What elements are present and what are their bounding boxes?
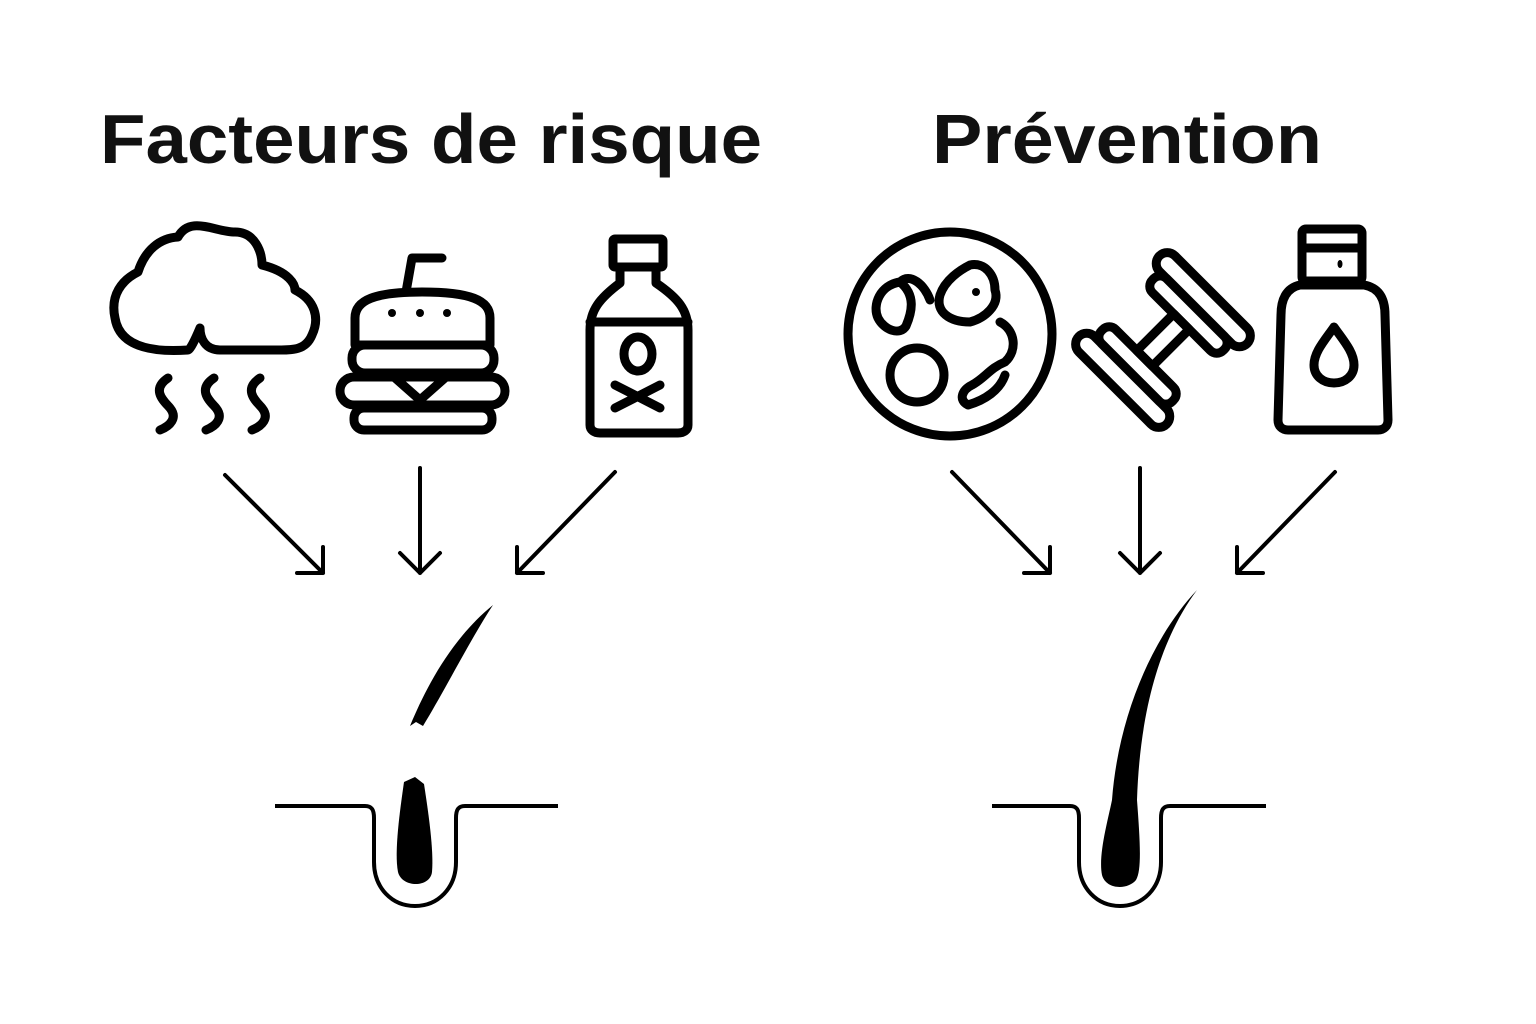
hair follicle: healthy hair: [992, 590, 1266, 906]
icon: dumbbell: [1071, 248, 1255, 432]
icon: spray bottle: [1278, 229, 1388, 430]
icon: healthy food plate: [848, 232, 1052, 436]
arrows: risk factors: [225, 468, 615, 573]
hair follicle: damaged hair: [275, 605, 558, 906]
title: prevention: Prévention: [932, 100, 1322, 178]
arrows: prevention: [952, 468, 1335, 573]
title: risk factors: Facteurs de risque: [100, 100, 762, 178]
icon: burger and drink: [340, 258, 505, 430]
icon: pollution cloud: [114, 226, 316, 430]
icon: poison bottle: [590, 239, 688, 433]
